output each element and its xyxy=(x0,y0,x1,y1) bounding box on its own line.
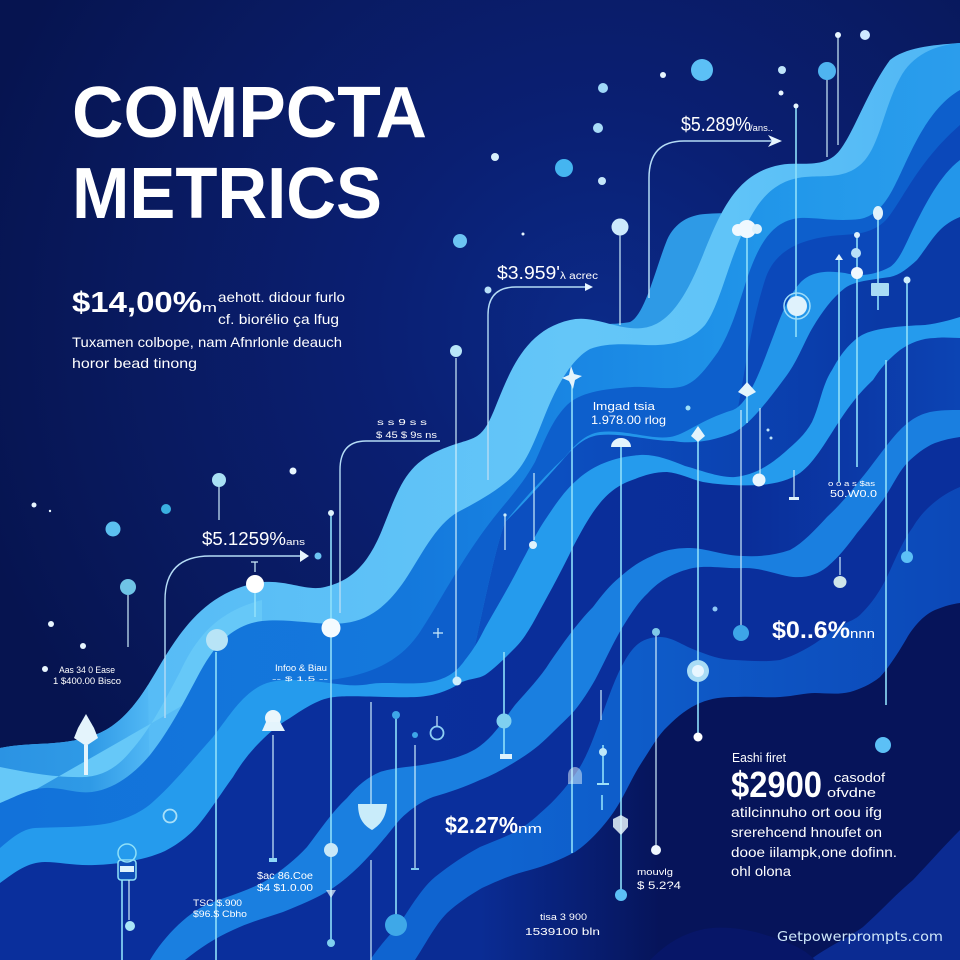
stat block: top left: $14,00% xyxy=(72,287,202,319)
small labels: 1 $400.00 Bisco xyxy=(53,676,121,686)
small labels: lmgad tsia xyxy=(593,401,656,413)
wave: darkest band xyxy=(415,603,960,960)
stat block: top left: cf. biorélio ça lfug xyxy=(218,311,339,327)
stat block: $2900: casodof xyxy=(834,770,885,785)
wave: third band inner shade xyxy=(738,125,960,420)
wave: rear hump xyxy=(560,213,760,345)
callout arrow: $3.959% xyxy=(484,263,598,480)
small labels: 1539100 bln xyxy=(525,927,600,938)
callout arrow: $5.289%: $5.289% xyxy=(681,114,751,136)
stat block: $2900: ofvdne xyxy=(827,785,876,800)
stat block: $2900: $2900 xyxy=(731,764,822,805)
stat block: $2900: Eashi firet xyxy=(732,750,786,765)
wave: thin bright band xyxy=(475,160,960,960)
small labels: mouvlg xyxy=(637,867,673,877)
wave: bottom right corner xyxy=(810,830,960,960)
small labels: $4 $1.0.00 xyxy=(257,883,314,894)
stat: $0..6%: $0..6% xyxy=(772,617,850,644)
stat block: top left: Tuxamen colbope, nam Afnrlonle deauch xyxy=(72,334,342,350)
wave: left light strip xyxy=(0,600,262,810)
floating dots xyxy=(32,30,870,672)
callout arrow: $5.1259% xyxy=(165,529,309,718)
title: METRICS xyxy=(72,154,382,234)
wave: bright middle band xyxy=(0,317,960,960)
callout arrow: $5.1259%: $5.1259% xyxy=(202,529,286,549)
wave: deep blue band xyxy=(370,487,960,960)
small labels: 50.W0.0 xyxy=(830,489,878,500)
stat block: top left: aehott. didour furlo xyxy=(218,289,345,305)
pins: upper right xyxy=(612,32,913,753)
stat: $2.27%: $2.27% xyxy=(445,812,518,838)
small labels: Aas 34 0 Ease xyxy=(59,665,115,675)
callout arrow: small: s s 9 s s xyxy=(377,418,427,427)
stat block: $2900: dooe iilampk,one dofinn. xyxy=(731,844,897,860)
callout arrow: $3.959%: $3.959' xyxy=(497,263,560,283)
pins: lower left xyxy=(74,473,444,960)
callout arrow: small xyxy=(340,418,440,613)
title: COMPCTA xyxy=(72,73,427,153)
small labels: $ac 86.Coe xyxy=(257,871,313,882)
stat block: $2900 xyxy=(731,750,897,879)
wave: navy below thin band xyxy=(475,217,960,960)
callout arrow: $3.959%: λ acrec xyxy=(560,271,598,282)
pins: center xyxy=(450,345,749,901)
stat block: top left: m xyxy=(202,300,217,315)
callout arrow: $5.1259%: ans xyxy=(286,537,306,547)
wave: third band xyxy=(330,90,960,960)
callout arrow: $5.289% xyxy=(649,114,782,298)
small labels: tisa 3 900 xyxy=(540,912,587,922)
callout arrow: small: $ 45 $ 9s ns xyxy=(376,430,438,440)
callout arrow: $5.289%: /ans.. xyxy=(750,123,773,133)
stat block: $2900: atilcinnuho ort oou ifg xyxy=(731,804,882,820)
wave: lower blue band xyxy=(150,410,960,960)
small labels: TSC $.900 xyxy=(193,898,242,908)
small labels: Infoo & Biau xyxy=(275,663,327,673)
stat block: top left xyxy=(72,287,345,371)
small labels xyxy=(53,401,878,938)
small labels: -- $ 1.5 -- xyxy=(272,677,328,683)
stat block: $2900: srerehcend hnoufet on xyxy=(731,824,882,840)
title xyxy=(72,73,427,234)
small labels: $96.$ Cbho xyxy=(193,909,247,919)
small labels: o o a s $as xyxy=(828,481,876,488)
stat: $0..6%: nnn xyxy=(850,626,875,641)
wave: bottom hump xyxy=(650,928,815,960)
small labels: 1.978.00 rlog xyxy=(591,413,666,427)
small labels: $ 5.2?4 xyxy=(637,880,681,892)
wave: navy band xyxy=(0,338,960,960)
watermark: Getpowerprompts.com xyxy=(777,930,943,945)
stat: $2.27%: nm xyxy=(518,821,542,836)
stat block: top left: horor bead tinong xyxy=(72,355,197,371)
stat block: $2900: ohl olona xyxy=(731,863,791,879)
wave: left hump xyxy=(0,685,150,800)
wave: lower navy band xyxy=(185,437,960,960)
